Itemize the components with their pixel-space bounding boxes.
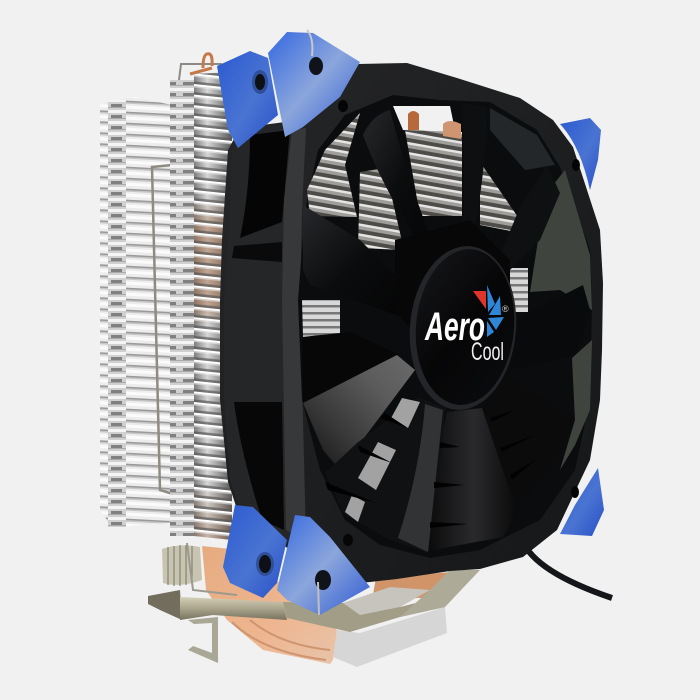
frame screw holes bbox=[338, 100, 580, 546]
left clamp plate bbox=[148, 590, 182, 620]
blade: top bbox=[462, 103, 487, 248]
knurled thumb nut bbox=[162, 545, 202, 585]
right strap bbox=[400, 570, 480, 617]
gloss band bbox=[398, 404, 443, 552]
rear mounting wire bbox=[152, 165, 176, 495]
heat pipe tips bbox=[190, 54, 212, 74]
frame side wall bbox=[224, 122, 300, 545]
silver base block bbox=[333, 607, 447, 667]
blue corner: top right bbox=[560, 118, 601, 190]
blue corner: bottom right bbox=[560, 468, 604, 536]
blade: bottom left glossy bbox=[325, 397, 445, 553]
rear fin stack bbox=[100, 97, 178, 527]
upper cavity bbox=[240, 130, 290, 238]
mounting bracket bbox=[148, 543, 480, 663]
blade: upper right bbox=[498, 165, 560, 277]
blade: bottom bbox=[430, 408, 517, 550]
blade ribs bbox=[325, 410, 535, 528]
olive panel upper right bbox=[530, 170, 592, 310]
logo wordmark: Cool: Cool bbox=[471, 338, 504, 366]
hub with logo bbox=[403, 242, 523, 414]
fan opening bbox=[298, 95, 592, 558]
fins seen through fan bbox=[302, 111, 528, 337]
spring wire bbox=[187, 543, 237, 595]
blue corner: top left rear bbox=[217, 51, 278, 148]
heat pipe tops behind fan bbox=[408, 111, 419, 130]
olive panel lower right bbox=[560, 340, 592, 470]
top wire clip bbox=[179, 64, 222, 80]
blue corner: top left front bbox=[268, 30, 360, 137]
frame strip bbox=[282, 128, 306, 540]
upper plate bbox=[343, 587, 430, 615]
blade: right bbox=[510, 285, 590, 370]
gloss highlights bbox=[345, 398, 420, 522]
lower strap band bbox=[283, 597, 445, 632]
fan frame bbox=[220, 63, 603, 585]
lower cavity bbox=[234, 402, 284, 530]
light gap behind fan bbox=[393, 106, 456, 135]
hanging latch bbox=[188, 617, 218, 663]
blade: upper left bbox=[363, 110, 436, 262]
blade: lower right bbox=[483, 375, 575, 507]
olive shadow area top bbox=[490, 108, 555, 170]
fan blades bbox=[302, 103, 590, 553]
blade: lower left bbox=[303, 355, 415, 470]
blade: upper ribbed region bbox=[302, 332, 400, 403]
blade: left bbox=[303, 205, 410, 318]
blue corner: bottom left front bbox=[277, 515, 370, 615]
registered mark: ® bbox=[502, 304, 509, 314]
hub surround shadow bbox=[395, 220, 510, 340]
logo wordmark: Aero: Aero bbox=[424, 305, 485, 349]
power cable bbox=[522, 540, 612, 598]
blue corner: bottom left rear bbox=[223, 505, 287, 598]
copper heat pipes at base bbox=[202, 546, 452, 664]
front fin stack with heat pipes bbox=[170, 54, 232, 540]
shelf bbox=[232, 242, 282, 262]
brass strap bbox=[180, 597, 287, 620]
logo emblem bbox=[473, 285, 509, 337]
